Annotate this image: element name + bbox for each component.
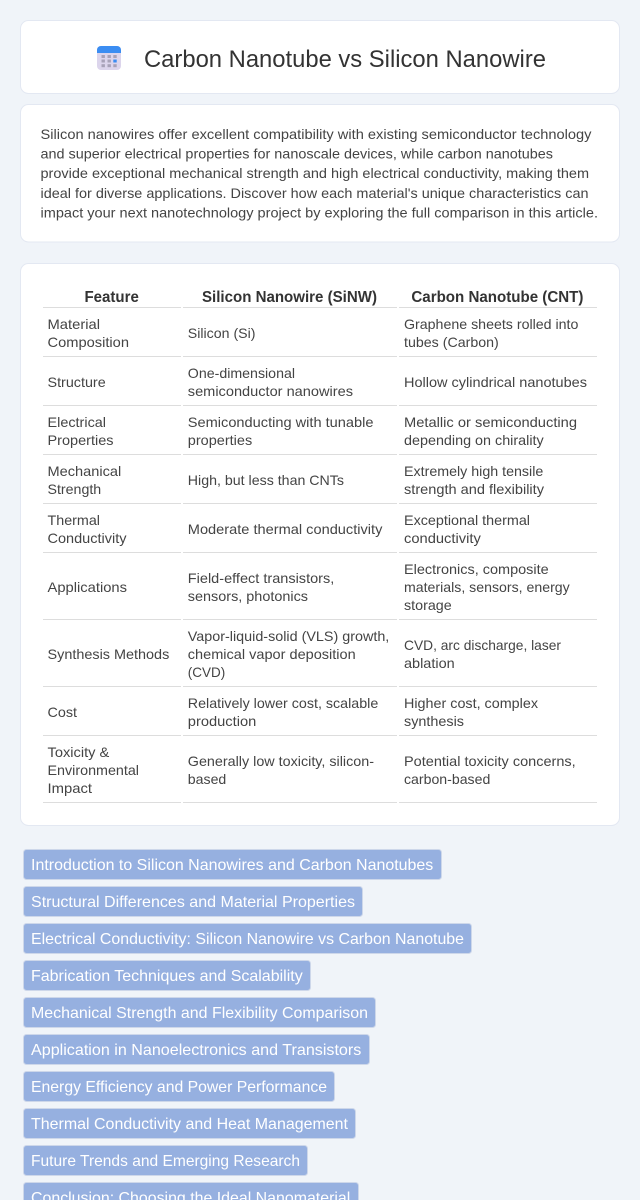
row: electrical properties xyxy=(43,414,597,455)
row: cost: Cost xyxy=(48,704,77,720)
table header row: Carbon Nanotube (CNT) xyxy=(411,289,583,306)
row: synthesis methods: Vapor-liquid-solid (VLS) growth, xyxy=(188,628,389,644)
row: applications: Electronics, composite xyxy=(404,561,549,577)
row: synthesis methods: (CVD) xyxy=(188,664,225,680)
row: electrical properties: Properties xyxy=(48,432,114,448)
tag: structural differences xyxy=(24,886,362,916)
table header row xyxy=(43,289,597,308)
row: cost: synthesis xyxy=(404,713,464,729)
row: toxicity and environmental impact: based xyxy=(188,771,226,787)
row: applications: storage xyxy=(404,597,452,613)
row: electrical properties: depending on chirality xyxy=(404,432,544,448)
row: structure: semiconductor nanowires xyxy=(188,383,353,399)
intro paragraph xyxy=(40,126,598,220)
row: material composition: Composition xyxy=(48,334,129,350)
tag: mechanical strength xyxy=(24,998,376,1028)
row: electrical properties: Semiconducting with tunable xyxy=(188,414,374,430)
tag: application in nanoelectronics: Application in Nanoelectronics and Transistors xyxy=(31,1042,361,1059)
section tag list xyxy=(24,850,472,1200)
intro paragraph: ideal for diverse applications. Discover how each material's unique characteristics can xyxy=(40,185,589,201)
row: thermal conductivity: Thermal xyxy=(48,512,100,528)
row: applications: Field-effect transistors, xyxy=(188,570,334,586)
intro paragraph: and superior electrical properties for nanoscale devices, while carbon nanotubes xyxy=(40,146,553,162)
panel: introduction xyxy=(20,104,620,242)
row: thermal conductivity xyxy=(43,512,597,553)
tag: energy efficiency: Energy Efficiency and Power Performance xyxy=(31,1079,327,1096)
row: toxicity and environmental impact: Potential toxicity concerns, xyxy=(404,753,576,769)
row: applications: sensors, photonics xyxy=(188,588,308,604)
row: toxicity and environmental impact: Environmental xyxy=(48,762,139,778)
row: cost xyxy=(43,695,597,736)
row: mechanical strength: High, but less than CNTs xyxy=(188,472,344,488)
tag: fabrication techniques xyxy=(24,960,310,990)
table header row: Silicon Nanowire (SiNW) xyxy=(202,289,377,306)
tag: electrical conductivity xyxy=(24,924,472,954)
tag: electrical conductivity: Electrical Conductivity: Silicon Nanowire vs Carbon Nanotube xyxy=(31,931,464,948)
row: synthesis methods: ablation xyxy=(404,655,455,671)
row: synthesis methods: CVD, arc discharge, laser xyxy=(404,637,561,653)
tag: future trends: Future Trends and Emerging Research xyxy=(31,1153,300,1170)
row: structure: One-dimensional xyxy=(188,365,295,381)
panel: comparison table xyxy=(20,264,620,826)
tag: conclusion xyxy=(24,1182,358,1200)
row: structure: Hollow cylindrical nanotubes xyxy=(404,374,587,390)
tag: mechanical strength: Mechanical Strength and Flexibility Comparison xyxy=(31,1005,368,1022)
row: toxicity and environmental impact: Impact xyxy=(48,780,92,796)
row: cost: Relatively lower cost, scalable xyxy=(188,695,379,711)
tag: structural differences: Structural Differences and Material Properties xyxy=(31,894,355,911)
row: cost: Higher cost, complex xyxy=(404,695,538,711)
row: thermal conductivity: Conductivity xyxy=(48,530,126,546)
row: electrical properties: Metallic or semiconducting xyxy=(404,414,577,430)
table header row: Feature xyxy=(84,289,139,306)
row: synthesis methods: chemical vapor deposition xyxy=(188,646,356,662)
intro paragraph: Silicon nanowires offer excellent compatibility with existing semiconductor technology xyxy=(40,126,592,142)
row: toxicity and environmental impact: Toxicity & xyxy=(48,744,110,760)
row: mechanical strength xyxy=(43,463,597,504)
row: material composition xyxy=(43,316,597,357)
row: cost: production xyxy=(188,713,256,729)
intro paragraph: provide exceptional mechanical strength and high electrical conductivity, making them xyxy=(40,165,589,181)
row: applications: materials, sensors, energy xyxy=(404,579,570,595)
row: material composition: Silicon (Si) xyxy=(188,325,256,341)
intro paragraph: impact your next nanotechnology project by exploring the full comparison in this article. xyxy=(40,204,598,220)
row: mechanical strength: Strength xyxy=(48,481,101,497)
tag: thermal conductivity xyxy=(24,1108,356,1138)
tag: introduction xyxy=(24,850,442,880)
tag: fabrication techniques: Fabrication Techniques and Scalability xyxy=(31,968,303,985)
row: thermal conductivity: conductivity xyxy=(404,530,481,546)
row: thermal conductivity: Moderate thermal conductivity xyxy=(188,521,382,537)
row: synthesis methods: Synthesis Methods xyxy=(48,646,169,662)
row: toxicity and environmental impact xyxy=(43,744,597,803)
row: electrical properties: Electrical xyxy=(48,414,106,430)
tag: application in nanoelectronics xyxy=(24,1034,370,1064)
row: applications xyxy=(43,561,597,620)
title: Carbon Nanotube vs Silicon Nanowire xyxy=(144,46,546,73)
tag: introduction: Introduction to Silicon Nanowires and Carbon Nanotubes xyxy=(31,857,433,874)
icon: calendar xyxy=(97,46,121,70)
row: structure xyxy=(43,365,597,406)
panel: header card xyxy=(20,20,620,94)
row: toxicity and environmental impact: Generally low toxicity, silicon- xyxy=(188,753,374,769)
row: material composition: Material xyxy=(48,316,100,332)
tag: energy efficiency xyxy=(24,1072,334,1102)
row: applications: Applications xyxy=(48,579,127,595)
row: mechanical strength: Mechanical xyxy=(48,463,121,479)
row: mechanical strength: strength and flexibility xyxy=(404,481,544,497)
row: electrical properties: properties xyxy=(188,432,252,448)
tag: future trends xyxy=(24,1146,308,1176)
row: material composition: tubes (Carbon) xyxy=(404,334,499,350)
row: structure: Structure xyxy=(48,374,106,390)
row: synthesis methods xyxy=(43,628,597,687)
row: material composition: Graphene sheets rolled into xyxy=(404,316,579,332)
tag: thermal conductivity: Thermal Conductivity and Heat Management xyxy=(31,1116,349,1133)
row: toxicity and environmental impact: carbon-based xyxy=(404,771,490,787)
row: thermal conductivity: Exceptional thermal xyxy=(404,512,530,528)
row: mechanical strength: Extremely high tensile xyxy=(404,463,544,479)
